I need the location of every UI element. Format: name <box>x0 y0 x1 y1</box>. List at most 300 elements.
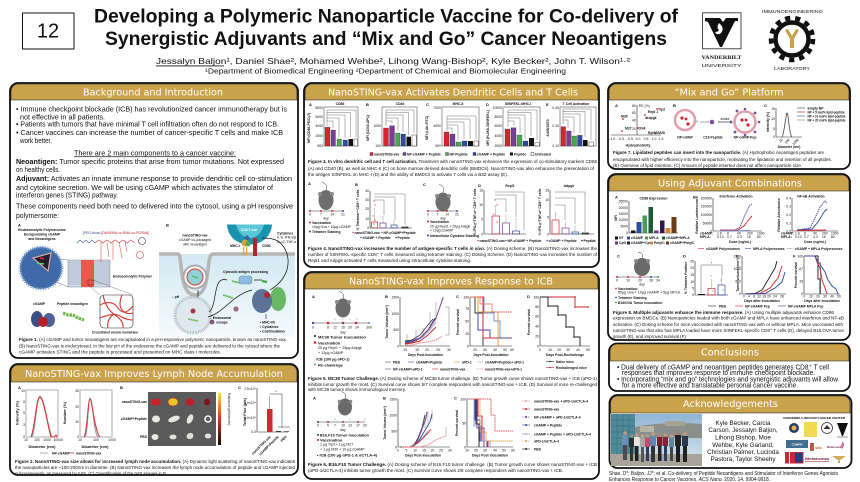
figure 1B: mechanism schematic: ↓ pH <box>172 295 180 299</box>
chart: B16 tumor growth: 15 <box>422 448 426 452</box>
chart: MC38 survival: 50 <box>503 348 507 352</box>
chart: total flux bars: 1.5×10⁹ <box>244 387 257 391</box>
text block: introduction: on healthy cells. <box>16 167 60 174</box>
chart: CD86 expression: 25000 <box>619 200 628 204</box>
chart: interferon activation: 200 <box>747 232 753 236</box>
chart: MC38 tumor growth: Tumor Volume (mm³) <box>385 305 389 339</box>
chart: Repl1 <box>473 183 526 236</box>
legend: figure 5: nanoSTING-vax <box>440 368 465 372</box>
chart: encapsulation vs hydrophobicity: 0.5 <box>644 137 648 141</box>
chart: Adpgk: % IFN-γ⁺TNF-α⁺ CD8⁺ T cells <box>538 188 542 235</box>
chart: tumor growth E: 24 <box>773 294 777 298</box>
chart: encapsulation vs hydrophobicity: OVA <box>638 126 646 130</box>
chart: CD86: A <box>309 102 312 107</box>
chart: encapsulation vs hydrophobicity: Trp2 <box>658 108 665 112</box>
chart: MHC-II <box>425 102 479 148</box>
figure 1 caption: cGAMP activates STING and the peptide is processed and presented on MHC class I molecules. <box>19 350 221 356</box>
figure 3 caption: the antigen SIINFEKL on MHC-I (D) and the ability of BMDCs to activate T cells via a B3Z assay (E). <box>308 172 508 178</box>
figure 6A: B16.F10 dosing scheme: 17 <box>356 424 360 428</box>
chart: T cell activation: 0.10 <box>552 144 559 148</box>
diagram: lipid insertion <box>673 103 760 139</box>
logo: ImmunoEngineering Laboratory: LABORATORY <box>774 66 810 71</box>
chart: MC38 tumor growth: 1500 <box>391 296 399 300</box>
figure 1B: mechanism schematic: • MHC-I/II <box>260 320 275 324</box>
chart: interferon activation: MPLA: <box>700 235 711 239</box>
chart: CD86 expression: 0 <box>626 231 628 235</box>
chart: DLS intensity <box>14 385 63 449</box>
affiliations: ¹Department of Biomedical Engineering ²Department of Chemical and Biomolecular Engineering <box>205 68 566 76</box>
chart: CD40: CD40 <box>396 102 404 106</box>
figure 1B: mechanism schematic: • Cytokines <box>260 325 278 329</box>
chart: B16 tumor growth: 500 <box>391 430 397 434</box>
chart: B16 tumor growth: 0 <box>397 448 399 452</box>
figure 6A: B16.F10 dosing scheme <box>313 391 378 458</box>
chart: interferon activation: B <box>693 194 696 200</box>
chart: tetramer positive cells: % Tetramer⁺ CD8⁺ T cells <box>356 189 360 231</box>
text block: introduction: • Immune checkpoint blockade (ICB) has revolutionized cancer immunotherapy but is <box>16 106 288 113</box>
text block: acknowledged names: Lihong Bishop, Moe <box>715 434 771 442</box>
panel: conclusions <box>609 344 850 391</box>
legend: figure 3: NP-cGAMP + Peptide <box>407 152 441 156</box>
chart: DLS number: 10 <box>75 420 79 424</box>
figure 3 caption <box>308 159 597 178</box>
legend: figure 5: αPD-1 <box>462 360 472 364</box>
chart: tetramer positive D: 20 <box>690 266 694 270</box>
chart: B16 survival: C <box>454 396 457 400</box>
text block: introduction: interferon genes (STING) pathway. <box>16 193 118 200</box>
chart: tetramer positive cells: 20 <box>365 207 369 211</box>
chart: NF-kB activation: 8 <box>804 232 806 236</box>
heading: lymph node: NanoSTING-vax Improves Lymph Node Accumulation <box>25 369 283 380</box>
chart: tetramer positive D: 0 <box>692 293 694 297</box>
figure 6A: B16.F10 dosing scheme: ↓ <box>364 417 366 421</box>
figure 5 caption: with MC38 tumors shows immunological memory. <box>308 387 406 393</box>
figure 1 caption: (B) NanoSTING-vax is endocytosed. In the low pH of the endosome the cGAMP and peptide are delivered to the cytosol where the <box>19 344 280 350</box>
text block: conclusions: responses that improves response to immune checkpoint blockade. <box>622 368 815 377</box>
chart: DLS number: 30 <box>75 389 79 393</box>
chart: DLS number: 1000 <box>108 438 116 442</box>
chart: DLS intensity: A <box>18 385 21 390</box>
logos: funding and affiliations: VANDERBILT-INGRAM CANCER CENTER <box>783 416 845 420</box>
figure: IVIS images: nanoSTING-vax <box>122 400 147 404</box>
chart: DLS intensity: 10 <box>21 389 25 393</box>
legend: dose charts: MPLA Polyersomes <box>753 247 785 251</box>
chart: encapsulation vs hydrophobicity: -0.5 <box>618 137 624 141</box>
title: Developing a Polymeric Nanoparticle Vaccine for Co-delivery of <box>94 6 679 28</box>
chart: MHC-II: 4000 <box>433 124 441 128</box>
chart: B16 survival: 50 <box>502 448 506 452</box>
chart: CD40 <box>366 102 417 148</box>
chart: T cell activation: E <box>546 102 549 107</box>
chart: MHC-II: 500 <box>435 144 441 148</box>
chart: MC38 rechallenge survival: 20 <box>535 334 539 338</box>
legend: tetramer chart: nanoSTING-vax <box>354 231 380 235</box>
chart: MC38 tumor growth: 15 <box>415 348 419 352</box>
chart: interferon activation: Interferon Activation <box>719 194 753 198</box>
figure 5A: MC38 dosing scheme: 12 <box>333 326 337 330</box>
chart: B16 survival: 50 <box>462 422 466 426</box>
figure 5A: MC38 dosing scheme: A <box>312 294 315 299</box>
diagram: lipid insertion: + <box>696 119 699 124</box>
chart: Adpgk: 0 <box>547 232 549 236</box>
figure 1 caption: Figure 1. (A) cGAMP and tumor neoantigens are encapsulated in a pH-responsive polymeric nanoparticle, known as nanoSTING-vax. <box>19 337 287 343</box>
figure 7 caption: (B) Overview of lipid insertion. (C) Amount of peptide inserted does not affect nanoparticle size. <box>613 163 802 169</box>
chart: NF-kB activation: MPLA: <box>781 235 792 239</box>
legend: figure 3 <box>370 152 551 156</box>
chart: encapsulation vs hydrophobicity: Adpgk <box>646 116 657 120</box>
legend: figure 3: Untreated <box>535 152 551 156</box>
panel: activates dendritic cells and T cells <box>304 83 599 267</box>
chart: survival F: 33 <box>799 280 803 284</box>
figure 5A: MC38 dosing scheme <box>312 291 372 368</box>
chart: MC38 tumor growth: Days Post-Inoculation <box>408 352 443 357</box>
legend: figure 4 cytokine charts: Peptide <box>584 239 596 243</box>
figure 5 caption <box>308 376 597 393</box>
chart: MC38 rechallenge survival: 100 <box>533 296 539 300</box>
chart: CD40: B <box>366 102 369 107</box>
chart: SIINFEKL MHC-I: SIINFEKL:MHC-I <box>505 102 531 106</box>
chart: NF-kB activation <box>777 194 839 244</box>
text block: conclusions <box>617 362 838 389</box>
chart: CD86 expression: CpG <box>619 241 627 245</box>
heading: activates DCs: NanoSTING-vax Activates Dendritic Cells and T Cells <box>328 88 578 98</box>
figure 1A: polymersome schematic: Endosomolytic Polymersome <box>18 228 66 232</box>
chart: B16 tumor growth: Days Post-Inoculation <box>405 452 441 458</box>
legend: figure 6: cGAMP + Peptide + αPD-1/αCTLA-4 <box>534 432 591 436</box>
figure 1B: mechanism schematic: IL-12, TNF-α <box>277 240 296 244</box>
chart: encapsulation vs hydrophobicity: Rpl18/M28 <box>648 131 665 135</box>
chart: interferon activation: 100000 <box>701 213 712 217</box>
chart: NF-kB activation: 80 <box>831 235 835 239</box>
diagram: lipid insertion: B <box>673 103 676 108</box>
figure 8 caption: nanoSTING-vax that also has MPLA loaded have more SIINFEKL-specific CD8⁺ T cells (D), delayed B16.OVA tumor <box>613 328 844 334</box>
figure 1A: polymersome schematic: A <box>18 222 21 228</box>
legend: figure 6: nanoSTING-vax <box>534 408 559 412</box>
figure 5A: MC38 dosing scheme: 25 µg Repl1 + 25µg Adpgk <box>318 346 362 350</box>
chart: total flux bars: PBS <box>280 434 288 443</box>
figure 1A: polymersome schematic: Encapsulating cGAMP <box>24 232 61 236</box>
text block: introduction: polymersome: <box>16 213 59 220</box>
figure 5A: MC38 dosing scheme: 0 <box>312 326 314 330</box>
diagram: lipid insertion: C18 Peptide <box>703 135 723 139</box>
chart: CD86 expression: CD86 Expression <box>640 196 667 200</box>
chart: particle size: 15 <box>771 107 775 111</box>
heading: conclusions: Conclusions <box>701 348 759 358</box>
chart: encapsulation vs hydrophobicity <box>609 103 665 148</box>
legend: figure 6: NP-cGAMP + αPD-1/αCTLA-4 <box>534 416 581 420</box>
figure 8C: dosing scheme: 50µg Ova + 10µg cGAMP + 5µg MPLA <box>618 290 681 294</box>
figure 4 caption: Figure 4. NanoSTING-vax increases the number of antigen-specific T cells in vivo. (A) Dosing scheme. (B) NanoSTING-vax increases the <box>308 246 597 252</box>
figure 4C: dosing scheme: day <box>440 216 446 220</box>
figure 1A: polymersome schematic: Endosomolytic Polymer <box>113 274 153 278</box>
chart: CD86 expression <box>614 194 695 245</box>
chart: interferon activation: 16 <box>747 235 751 239</box>
text block: conclusions: • Dual delivery of cGAMP and neoantigen peptides generates CD8⁺ T cell <box>617 362 829 371</box>
chart: NF-kB activation: 0.0 <box>786 230 791 234</box>
figure 1B: mechanism schematic: Cytosolic antigen processing <box>223 270 268 274</box>
chart: interferon activation: 3.3 <box>737 235 742 239</box>
chart: MC38 survival: 25 <box>465 332 469 336</box>
text block: acknowledged names <box>707 420 779 463</box>
legend: figure 5: cGAMP+Peptide <box>416 360 442 364</box>
legend: dose charts: cGAMP + MPLA Polyersomes <box>795 247 843 251</box>
chart: tumor growth E: 0 <box>743 294 745 298</box>
figure 6A: B16.F10 dosing scheme: 7 <box>334 424 336 428</box>
heading: adjuvant combinations: Using Adjuvant Combinations <box>658 178 802 190</box>
chart: Adpgk: Adpgk <box>564 184 574 188</box>
text block: acknowledged names: Pastora, Taylor Sheehy <box>710 456 776 463</box>
chart: MC38 rechallenge survival: 40 <box>535 324 539 328</box>
chart: Adpgk: 10 <box>545 198 549 202</box>
chart: MC38 rechallenge survival: 60 <box>535 314 539 318</box>
title: Synergistic Adjuvants and “Mix and Go” Cancer Neoantigens <box>105 28 667 50</box>
chart: encapsulation vs hydrophobicity: Repl 1 <box>648 110 658 114</box>
chart: total flux bars: 5.0×10⁸ <box>244 416 257 420</box>
chart: MC38 rechallenge survival: Rechallenged mice <box>556 366 587 370</box>
figure 6A: B16.F10 dosing scheme: 13 <box>348 424 352 428</box>
legend: tetramer chart: Peptide <box>398 236 410 240</box>
chart: B16 tumor growth: 1500 <box>389 398 397 402</box>
chart: MC38 rechallenge survival: 20 <box>557 348 561 352</box>
chart: tumor growth E: 1000 <box>733 267 741 271</box>
text block: acknowledged names: Carson, Jessalyn Baljon, <box>708 427 778 434</box>
figure 8C: dosing scheme: 0 <box>616 278 618 282</box>
chart: CD86 expression: MFI <box>614 215 618 221</box>
chart: CD40: 100 <box>375 144 381 148</box>
figure 1B: mechanism schematic: CD8 T cell <box>241 228 257 232</box>
chart: interferon activation <box>693 194 765 244</box>
chart: NF-kB activation: Dose (ng/mL) <box>804 240 826 244</box>
chart: DLS intensity: 10 <box>24 438 28 442</box>
figure 1B: mechanism schematic: MHC-I <box>230 244 240 248</box>
chart: particle size: Diameter (nm) <box>778 145 800 149</box>
figure 4C: dosing scheme: Vaccination <box>430 220 449 224</box>
chart: tetramer positive D: 10 <box>690 280 694 284</box>
chart: CD86 expression: cGAMP+PolyIC <box>670 241 695 245</box>
diagram: lipid insertion: NP-cdiNP <box>677 135 693 139</box>
chart: tetramer positive cells: B <box>355 182 358 187</box>
panel: improves response to ICB <box>304 272 599 479</box>
logos: funding and affiliations: Melanoma <box>827 445 841 449</box>
text block: acknowledged names: Kyle Becker, Carcia <box>716 420 771 427</box>
chart: CD86 expression: 5000 <box>620 224 628 228</box>
citation <box>609 471 838 482</box>
figure 4A: dosing scheme: 0 <box>309 212 311 216</box>
chart: NF-kB activation: 0.2 <box>786 213 791 217</box>
chart: CD86 expression: NT <box>619 236 624 240</box>
legend: figure 5: PBS <box>393 360 401 364</box>
chart: DLS intensity: 5 <box>23 411 25 415</box>
figure 1B: mechanism schematic: with neoantigen <box>183 242 207 246</box>
chart: total flux bars: 0.0 <box>251 430 256 434</box>
chart: NF-kB activation: 0.1 <box>786 222 791 226</box>
chart: DLS number: 20 <box>75 405 79 409</box>
chart: DLS intensity: 3 <box>23 423 25 427</box>
chart: tumor growth E: 28 <box>780 294 784 298</box>
chart: particle size: 100 <box>784 138 791 145</box>
chart: DLS intensity: 100 <box>34 438 40 442</box>
chart: MC38 survival: C <box>456 294 459 299</box>
chart: B16 survival: 0 <box>464 446 466 450</box>
text block: introduction: Adjuvant: Activates an innate immune response to provide dendritic cell co-stimulation <box>16 176 292 183</box>
chart: survival F <box>793 254 841 303</box>
chart: encapsulation vs hydrophobicity: 20 <box>632 127 636 131</box>
chart: MC38 rechallenge survival <box>527 294 590 370</box>
chart: CD86: 4000 <box>315 124 323 128</box>
chart: CD86 <box>307 102 358 148</box>
chart: SIINFEKL MHC-I: 4000 <box>494 134 502 138</box>
chart: MC38 survival: 0 <box>467 344 469 348</box>
figure 4C: dosing scheme: 0 <box>427 212 429 216</box>
chart: tetramer positive D: D <box>683 254 686 258</box>
figure 6A: B16.F10 dosing scheme: • ICB (100 µg αPD-1 & αCTLA-4) <box>317 452 378 458</box>
legend: tetramer chart: cGAMP + Peptide <box>362 236 391 240</box>
text block: conclusions: for a more effective and translatable personal cancer vaccine. <box>622 380 798 389</box>
text block: introduction: There are 2 main components to a cancer vaccine: <box>74 150 236 157</box>
chart: MC38 survival: 20 <box>473 348 477 352</box>
chart: MC38 tumor growth <box>385 294 451 357</box>
chart: CD86 expression: cGAMP <box>631 236 644 240</box>
chart: CD86: 2000 <box>315 134 323 138</box>
figure 6A: B16.F10 dosing scheme: day <box>340 428 346 432</box>
chart: survival F: 10 <box>809 294 813 298</box>
chart: survival F: Percent survival <box>794 262 798 288</box>
figure 1B: mechanism schematic: escape <box>216 320 228 324</box>
legend: figure 3: NP-Peptide <box>450 152 468 156</box>
citation: Shae, D*; Baljon, JJ*; et al. Co-delivery of Peptide Neoantigens and Stimulator of Interferon Genes Agonists <box>609 471 838 477</box>
figure 8C: dosing scheme: Tetramer Staining <box>618 296 647 300</box>
figure: IVIS images: PBS <box>140 435 148 439</box>
chart: B16 tumor growth: B <box>383 396 386 400</box>
legend: figure 5 <box>385 360 524 372</box>
figure 4C: dosing scheme: C <box>423 182 426 187</box>
figure 4 caption: number of SIINFEKL-specific CD8⁺ T cells measured using tetramer staining. (C) Dosing Scheme. (D) NanoSTING-vax increases the number of <box>308 252 598 258</box>
figure 3 caption: (A) and CD40 (B), as well as MHC-II (C) on bone marrow derived dendritic cells (BMDCs). NanoSTING-vax also enhances the presentation of <box>308 166 595 172</box>
text block: acknowledged names: Wehbe, Kyle Garland, <box>712 442 774 449</box>
figure 4A: dosing scheme: Tetramer Staining <box>312 230 341 234</box>
chart: encapsulation vs hydrophobicity: EE (%) <box>639 104 650 108</box>
chart: MC38 survival: Days Post-Inoculation <box>474 352 509 357</box>
chart: interferon activation: 0.7 <box>727 235 732 239</box>
figure 1 caption <box>19 337 287 356</box>
chart: total flux bars <box>238 385 290 456</box>
chart: NF-kB activation: 0.3 <box>786 204 791 208</box>
chart: SIINFEKL MHC-I <box>486 102 540 148</box>
chart: total flux bars: nanoSTING-vax <box>251 435 272 456</box>
panel: background and introduction <box>10 83 298 358</box>
legend: figure 6 <box>522 400 591 452</box>
legend: figure 3: cGAMP + Peptide <box>477 152 505 156</box>
chart: DLS number <box>62 389 116 449</box>
chart: total flux bars: * <box>275 389 277 394</box>
figure 5A: MC38 dosing scheme: ↓ <box>356 317 358 321</box>
chart: particle size: 5 <box>773 127 775 131</box>
chart: B16 tumor growth: 20 <box>431 448 434 452</box>
figure 6 caption: (αPD-1/αCTLA-4) inhibits tumor growth the most. (C) Survival curve shows 2/8 complete responders with nanoSTING-vax + ICB. <box>308 468 563 474</box>
chart: tumor growth E: 20 <box>767 294 771 298</box>
chart: encapsulation vs hydrophobicity: A <box>615 103 618 108</box>
panel: lymph node accumulation <box>10 364 298 477</box>
chart: tumor growth E: 500 <box>735 280 741 284</box>
chart: encapsulation vs hydrophobicity: 80 <box>632 104 636 108</box>
chart: CD86 expression: 10000 <box>619 218 628 222</box>
figure 1B: mechanism schematic: • Costimulation <box>260 330 285 334</box>
chart: interferon activation: Dose (ng/mL) <box>729 240 751 244</box>
figure 1A: polymersome schematic: Crosslinked vesicle membrane <box>92 330 138 334</box>
chart: T cell activation: T Cell Activation <box>563 102 589 106</box>
chart: tumor growth E: E <box>736 254 739 258</box>
chart: B16 survival: 40 <box>493 448 497 452</box>
legend: size charts <box>40 452 101 456</box>
chart: SIINFEKL MHC-I: 6000 <box>494 124 502 128</box>
chart: survival F: 67 <box>799 267 803 271</box>
chart: encapsulation vs hydrophobicity: 1.5 <box>659 137 663 141</box>
chart: T cell activation: 0.40 <box>552 106 559 110</box>
chart: NF-kB activation: 16 <box>822 235 826 239</box>
figure 1B: mechanism schematic: IL-6, IFN-α/β <box>277 236 296 240</box>
legend: figure 4 cytokine charts: nanoSTING-vax <box>480 239 505 243</box>
chart: CD86: 500 <box>317 144 323 148</box>
figure 5A: MC38 dosing scheme: ↓ ICB (100 µg αPD-1) <box>314 358 350 362</box>
chart: survival F: 40 <box>830 294 834 298</box>
legend: figure 5: NP-cGAMP+αPD-1 <box>393 368 423 372</box>
figure 5A: MC38 dosing scheme: MC38 Tumor Inoculation <box>318 334 367 339</box>
figure: IVIS images: cGAMP+Peptide <box>121 417 147 421</box>
figure 5A: MC38 dosing scheme: ↓ <box>342 317 344 321</box>
figure 8 caption: expression on BMDCs. (B) Nanoparticles loaded with both cGAMP and MPLA have enhanced interferon and NF-κB <box>613 316 844 322</box>
chart: MC38 rechallenge survival: 40 <box>576 348 580 352</box>
chart: survival F: 0 <box>803 294 805 298</box>
chart: CD86 expression: 15000 <box>619 212 628 216</box>
chart: MC38 survival <box>456 294 514 357</box>
chart: MC38 survival: Percent survival <box>456 309 460 335</box>
text block: introduction: • Patients with tumors that have minimal T cell infiltration often do not respond to ICB. <box>16 122 279 129</box>
chart: MC38 rechallenge survival: 50 <box>586 348 590 352</box>
chart: tetramer positive cells: 0 <box>367 226 369 230</box>
chart: Adpgk <box>538 184 594 236</box>
chart: interferon activation: 40 <box>737 232 741 236</box>
chart: MC38 tumor growth: 0 <box>397 344 399 348</box>
chart: B16 tumor growth: 25 <box>439 448 443 452</box>
chart: particle size: Intensity (%) <box>766 112 770 132</box>
chart: interferon activation: 150000 <box>701 204 712 208</box>
chart: tumor growth E: 12 <box>757 294 761 298</box>
chart: MC38 rechallenge survival: 0 <box>539 348 541 352</box>
chart: encapsulation vs hydrophobicity: M27 <box>625 126 632 130</box>
legend: tetramer chart <box>352 231 416 240</box>
chart: tumor growth E <box>733 254 786 303</box>
chart: DLS number: Diameter (nm) <box>82 444 109 449</box>
figure 6A: B16.F10 dosing scheme: 5 <box>327 424 329 428</box>
chart: MC38 survival: 40 <box>493 348 497 352</box>
chart: CD86: CD86 <box>336 102 344 106</box>
logo: ImmunoEngineering Laboratory: IMMUNOENGINEERING <box>762 9 823 14</box>
figure 4C: dosing scheme <box>423 182 479 238</box>
chart: tetramer positive cells: 40 <box>365 189 369 193</box>
chart: B16 tumor growth: 0 <box>395 446 397 450</box>
figure 6A: B16.F10 dosing scheme: 10 <box>341 424 345 428</box>
figure: IVIS images: Radiance (p/s/cm²/sr) <box>227 393 231 425</box>
chart: MHC-II: MFI (I-Ab-FITC) <box>425 116 429 140</box>
chart: MC38 tumor growth: B <box>385 294 388 299</box>
chart: B16 tumor growth: 5 <box>406 448 408 452</box>
figure 7 caption <box>613 150 832 169</box>
figure 5A: MC38 dosing scheme: ↓ <box>349 317 351 321</box>
chart: NF-kB activation: 0.4 <box>786 196 791 200</box>
legend: figure 6: PBS <box>534 448 542 452</box>
chart: CD40: MFI (CD40-APC) <box>366 115 370 141</box>
chart: encapsulation vs hydrophobicity: -1.0 <box>609 137 615 141</box>
